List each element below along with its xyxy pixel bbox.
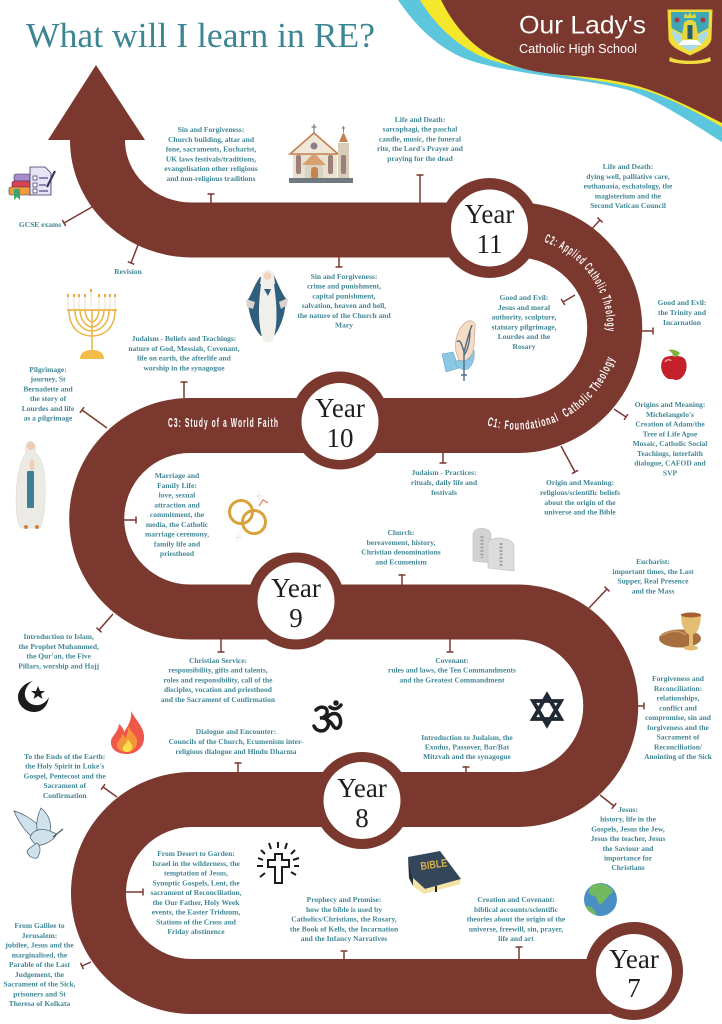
topic: Marriage and Family Life: media, the Catholic xyxy=(146,520,209,529)
year 11 marker: 11 xyxy=(476,229,502,259)
topic: Judaism Beliefs and Teachings: Judaism - Beliefs and Teachings: xyxy=(132,334,236,343)
topic: From Galilee to Jerusalem: Judgement, the xyxy=(15,970,65,979)
year 9 marker: Year xyxy=(271,573,321,603)
year 8 marker: 8 xyxy=(355,803,369,833)
topic: Forgiveness and Reconciliation: conflict and xyxy=(659,703,698,712)
topic: Pilgrimage: as a pilgrimage xyxy=(24,414,73,422)
topic: Creation and Covenant: biblical accounts/scientific xyxy=(474,905,559,914)
topic: Origin and Meaning (beliefs): religious/scientific beliefs xyxy=(540,488,620,497)
topic: Pilgrimage: journey, St xyxy=(29,375,66,384)
topic: Marriage and Family Life: commitment, the xyxy=(150,510,205,519)
topic: Pilgrimage xyxy=(22,365,107,428)
topic: Sin and Forgiveness (crime): Mary xyxy=(335,320,353,330)
icon: exam books xyxy=(9,167,55,200)
topic: Sin and Forgiveness (crime): the nature of the Church and xyxy=(297,311,391,320)
topic: Prophecy and Promise: Catholics/Christians, the Rosary, xyxy=(291,915,397,924)
topic: Introduction to Islam xyxy=(18,614,113,670)
topic: Church: Church: xyxy=(388,528,414,537)
topic: From Desert to Garden: Stations of the Cross and xyxy=(156,917,237,926)
topic: Good and Evil (moral authority): Lourdes and the xyxy=(498,332,551,341)
year 10 marker xyxy=(291,372,389,470)
year 11 marker: Year xyxy=(465,199,514,229)
topic: Church xyxy=(361,528,441,585)
topic: From Galilee to Jerusalem: prisoners and St xyxy=(13,989,66,998)
topic: Pilgrimage: Pilgrimage: xyxy=(29,365,67,374)
topic: From Galilee to Jerusalem xyxy=(3,921,91,1008)
topic: From Galilee to Jerusalem: Sacrament of the Sick, xyxy=(3,980,76,988)
topic: Life and Death (dying well): magisterium and the xyxy=(595,191,662,200)
icon: Our Lady of Lourdes statue xyxy=(16,441,45,529)
topic: Forgiveness and Reconciliation: Reconciliation: xyxy=(654,684,702,693)
icon: apple xyxy=(661,350,687,380)
topic: Origins and Meaning (art): Teachings, interfaith xyxy=(637,449,704,458)
topic: From Galilee to Jerusalem: Parable of the Last xyxy=(9,960,71,969)
topic: Eucharist: Eucharist: xyxy=(636,557,670,566)
topic: Life and Death (dying well) xyxy=(584,162,673,232)
topic: From Desert to Garden: Israel in the wilderness, the xyxy=(152,859,241,868)
topic: Eucharist: Supper, Real Presence xyxy=(617,577,689,586)
topic: Sin and Forgiveness (crime): salvation, heaven and hell, xyxy=(302,301,386,310)
topic: Jesus xyxy=(591,795,665,872)
year 9 marker: 9 xyxy=(289,603,303,633)
road label: C2: C2: Applied Catholic Theology xyxy=(545,234,616,332)
topic: Sin and Forgiveness (crime) xyxy=(297,257,391,330)
topic: Dialogue and Encounter: Councils of the Church, Ecumenism inter- xyxy=(168,737,304,746)
topic: Origin and Meaning (beliefs): about the origin of the xyxy=(544,498,616,507)
topic: Introduction to Judaism: Introduction to Judaism, the xyxy=(421,733,513,742)
topic: Life and Death (funeral rite): praying for the dead xyxy=(387,154,454,163)
topic: Good and Evil (Trinity): the Trinity and xyxy=(658,308,707,317)
topic: Prophecy and Promise xyxy=(290,895,399,959)
topic: Revision: Revision xyxy=(114,267,143,276)
topic: Sin and Forgiveness (church building): Sin and Forgiveness: xyxy=(178,125,244,134)
icon: church xyxy=(289,124,353,183)
topic: Marriage and Family Life: Family Life: xyxy=(157,481,197,490)
icon: menorah xyxy=(67,289,117,359)
topic: Christian Service: disciples, vocation and priesthood xyxy=(164,685,273,694)
topic: Introduction to Judaism: Exodus, Passover, Bar/Bat xyxy=(425,742,510,752)
topic: Marriage and Family Life: love, sexual xyxy=(159,490,195,500)
topic: Judaism Practices: Judaism - Practices: xyxy=(412,468,476,477)
topic: Creation and Covenant: Creation and Covenant: xyxy=(477,895,555,904)
topic: Covenant: rules and laws, the Ten Commandments xyxy=(388,666,516,675)
topic: From Galilee to Jerusalem: Theresa of Kolkata xyxy=(9,999,71,1008)
topic: To the Ends of the Earth xyxy=(24,752,117,800)
topic: Jesus: Christians xyxy=(611,863,645,872)
topic: Forgiveness and Reconciliation: Forgiveness and xyxy=(652,674,705,683)
icon: Bible: BIBLE xyxy=(420,857,448,873)
topic: Good and Evil (Trinity): Incarnation xyxy=(663,318,702,327)
icon: dove xyxy=(14,808,63,858)
topic: Creation and Covenant: life and art xyxy=(498,934,534,943)
topic: From Desert to Garden xyxy=(124,849,242,936)
topic: Prophecy and Promise: how the bible is used by xyxy=(306,905,382,914)
topic: Sin and Forgiveness (church building): UK laws festivals/traditions, xyxy=(166,154,256,163)
topic: Judaism Beliefs and Teachings: nature of God, Messiah, Covenant, xyxy=(128,344,240,353)
topic: Christian Service: Christian Service: xyxy=(189,656,247,665)
topic: Marriage and Family Life: attraction and xyxy=(154,500,201,509)
topic: Introduction to Islam: the Qur'an, the Five xyxy=(26,652,92,661)
topic: Life and Death (dying well): Second Vatican Council xyxy=(590,201,666,210)
topic: From Desert to Garden: sacrament of Reconciliation, xyxy=(150,888,242,897)
topic: From Desert to Garden: temptation of Jesus, xyxy=(164,868,228,878)
topic: Good and Evil (moral authority): Jesus and moral xyxy=(498,303,550,312)
header banner xyxy=(398,0,722,142)
icon: praying hands with rosary xyxy=(442,321,475,381)
icon: stone tablets xyxy=(473,528,514,571)
topic: Sin and Forgiveness (church building): fone, sacraments, Eucharist, xyxy=(166,145,256,154)
topic: Judaism Practices: festivals xyxy=(431,488,457,497)
icon: earth globe xyxy=(584,883,617,916)
topic: To the Ends of the Earth: Confirmation xyxy=(43,791,87,800)
topic: Judaism Beliefs and Teachings: worship in the synagogue xyxy=(143,363,225,372)
topic: Creation and Covenant: theories about the origin of the xyxy=(467,915,566,924)
topic: Sin and Forgiveness (church building): Church building, altar and xyxy=(168,135,255,144)
topic: Introduction to Judaism: Mitzvah and the synagogue xyxy=(423,752,512,761)
topic: Creation and Covenant: universe, freewill, sin, prayer, xyxy=(469,924,563,933)
topic: Marriage and Family Life: priesthood xyxy=(160,549,195,558)
topic: GCSE exams: GCSE exams xyxy=(19,220,61,229)
topic: Origins and Meaning (art): Michelangelo's xyxy=(646,410,694,419)
topic: From Desert to Garden: the Our Father, Holy Week xyxy=(153,898,240,907)
topic: Prophecy and Promise: Prophecy and Promise: xyxy=(307,895,381,904)
topic: Judaism Beliefs and Teachings xyxy=(128,334,240,398)
topic: Prophecy and Promise: the Book of Kells, the Incarnation xyxy=(290,924,399,933)
topic: To the Ends of the Earth: Sacrament of xyxy=(43,781,87,790)
topic: Marriage and Family Life xyxy=(122,471,209,558)
topic: Marriage and Family Life: Marriage and xyxy=(155,471,200,480)
topic: Forgiveness and Reconciliation: compromise, sin and xyxy=(645,713,712,722)
topic: Covenant xyxy=(388,639,516,684)
topic: GCSE exams xyxy=(19,207,92,229)
icon: Bible xyxy=(408,851,461,894)
year 11 marker xyxy=(440,178,540,278)
topic: Judaism Practices xyxy=(411,452,478,497)
icon: Virgin Mary statue xyxy=(246,270,288,342)
topic: Life and Death (dying well): euthanasia, eschatology, the xyxy=(584,182,673,191)
topic: Sin and Forgiveness (crime): capital punishment, xyxy=(312,291,376,300)
topic: Jesus: Jesus the teacher, Jesus xyxy=(591,834,665,843)
topic: Good and Evil (moral authority) xyxy=(491,293,575,351)
topic: From Desert to Garden: Friday abstinence xyxy=(167,927,225,936)
topic: Prophecy and Promise: and the Infancy Narratives xyxy=(301,934,387,943)
year 8 marker xyxy=(314,752,410,849)
topic: Jesus: Gospels, Jesus the Jew, xyxy=(591,824,665,833)
title: What will I learn in RE? xyxy=(26,16,375,55)
topic: Sin and Forgiveness (crime): crime and punishment, xyxy=(307,282,381,291)
topic: Church: Christian denominations xyxy=(361,548,441,557)
topic: Judaism Beliefs and Teachings: life on earth, the afterlife and xyxy=(137,354,232,363)
topic: Life and Death (funeral rite): candle, music, the funeral xyxy=(379,134,461,143)
topic: Sin and Forgiveness (church building): evangelisation other religious xyxy=(164,164,258,173)
topic: Christian Service xyxy=(161,639,276,704)
topic: Dialogue and Encounter: religious dialogue and Hindu Dharma xyxy=(175,747,297,756)
year 7 marker: 7 xyxy=(627,973,641,1003)
icon: bread and chalice xyxy=(659,612,701,650)
road label: C3: C3: Study of a World Faith xyxy=(168,416,279,430)
topic: Sin and Forgiveness (church building) xyxy=(164,125,258,203)
topic: Introduction to Islam: Pillars, worship and Hajj xyxy=(18,661,100,670)
topic: Sin and Forgiveness (crime): Sin and Forgiveness: xyxy=(311,272,377,281)
topic: Origin and Meaning (beliefs) xyxy=(540,446,620,517)
topic: From Desert to Garden: events, the Easter Triduum, xyxy=(152,908,240,916)
topic: Christian Service: responsibility, gifts and talents, xyxy=(168,666,268,675)
topic: Life and Death (funeral rite): rite, the Lord's Prayer and xyxy=(377,144,464,153)
topic: Origins and Meaning (art): Origins and Meaning: xyxy=(635,400,705,409)
topic: Marriage and Family Life: family life and xyxy=(154,539,201,548)
topic: From Galilee to Jerusalem: Jerusalem: xyxy=(22,931,57,940)
topic: From Desert to Garden: Synoptic Gospels, Lent, the xyxy=(152,878,240,887)
topic: Origin and Meaning (beliefs): universe and the Bible xyxy=(544,508,616,517)
topic: Jesus: history, life in the xyxy=(600,815,657,824)
topic: To the Ends of the Earth: To the Ends of the Earth: xyxy=(24,752,105,761)
topic: Church: and Ecumenism xyxy=(375,557,427,566)
topic: Forgiveness and Reconciliation: Anointing of the Sick xyxy=(644,752,713,761)
topic: Life and Death (funeral rite): Life and Death: xyxy=(395,115,445,124)
topic: Origins and Meaning (art): Mosaic, Catholic Social xyxy=(633,439,707,448)
topic: Introduction to Judaism xyxy=(421,733,513,772)
topic: Good and Evil (moral authority): Rosary xyxy=(513,342,536,351)
topic: Pilgrimage: Bernadette and xyxy=(23,384,74,393)
school name xyxy=(519,12,646,56)
topic: Eucharist xyxy=(589,557,694,608)
school name: Catholic High School xyxy=(519,42,637,56)
topic: Jesus: importance for xyxy=(604,854,653,862)
icon: flame xyxy=(111,711,144,754)
topic: From Galilee to Jerusalem: jubilee, Jesus and the xyxy=(4,940,74,950)
topic: Creation and Covenant xyxy=(467,895,566,959)
topic: Origins and Meaning (art) xyxy=(614,400,707,477)
topic: Origin and Meaning (beliefs): Origin and Meaning: xyxy=(546,478,614,487)
icon: school crest xyxy=(668,10,712,64)
topic: Revision xyxy=(114,245,143,276)
year 10 marker: Year xyxy=(315,393,365,423)
topic: Introduction to Islam: Introduction to Islam, xyxy=(23,632,94,641)
icon: om symbol xyxy=(314,702,341,731)
topic: Life and Death (dying well): dying well, palliative care, xyxy=(586,172,670,181)
topic: Good and Evil (Trinity) xyxy=(642,298,707,334)
year 7 marker xyxy=(585,922,683,1020)
topic: Christian Service: roles and responsibility, call of the xyxy=(164,675,273,684)
topic: Sin and Forgiveness (church building): and non-religious traditions xyxy=(166,174,256,183)
icon: wedding rings xyxy=(230,492,268,541)
winding road with arrow xyxy=(48,65,634,986)
topic: Good and Evil (moral authority): statuary pilgrimage, xyxy=(492,322,557,331)
icon: crescent and star xyxy=(18,681,49,712)
topic: Origins and Meaning (art): Tree of Life Apse xyxy=(643,429,698,438)
topic: Church: bereavement, history, xyxy=(367,538,436,547)
topic: Forgiveness and Reconciliation xyxy=(638,674,713,761)
topic: Eucharist: important times, the Last xyxy=(612,567,694,576)
year 10 marker: 10 xyxy=(326,423,354,453)
topic: Jesus: Jesus: xyxy=(618,805,638,814)
topic: Good and Evil (moral authority): Good and Evil: xyxy=(500,293,548,302)
topic: Forgiveness and Reconciliation: Sacrament of xyxy=(657,732,700,742)
topic: Life and Death (funeral rite): sarcophagi, the paschal xyxy=(383,125,457,134)
topic: From Desert to Garden: From Desert to Garden: xyxy=(157,849,235,858)
topic: Jesus: the Saviour and xyxy=(603,844,654,853)
topic: Good and Evil (Trinity): Good and Evil: xyxy=(658,298,706,307)
topic: Forgiveness and Reconciliation: forgiveness and the xyxy=(647,723,710,732)
topic: Covenant: and the Greatest Commandment xyxy=(399,675,505,684)
topic: Christian Service: and the Sacrament of Confirmation xyxy=(161,695,276,704)
topic: Origins and Meaning (art): Creation of Adam/the xyxy=(635,420,705,428)
topic: Origins and Meaning (art): SVP xyxy=(663,468,678,477)
topic: Dialogue and Encounter: Dialogue and Encounter: xyxy=(196,727,276,736)
topic: Introduction to Islam: the Prophet Muhammed, xyxy=(18,642,99,651)
topic: Forgiveness and Reconciliation: relationships, xyxy=(656,694,700,702)
topic: Judaism Practices: rituals, daily life and xyxy=(411,478,478,487)
year 8 marker: Year xyxy=(337,773,387,803)
topic: Life and Death (dying well): Life and Death: xyxy=(603,162,653,171)
topic: Good and Evil (moral authority): authority, sculpture, xyxy=(491,313,557,322)
year 7 marker: Year xyxy=(609,944,659,974)
year 9 marker xyxy=(248,552,344,650)
school name: Our Lady's xyxy=(519,12,646,40)
topic: Marriage and Family Life: marriage ceremony, xyxy=(145,530,209,538)
topic: From Galilee to Jerusalem: marginalised, the xyxy=(12,950,68,959)
icon: radiant cross xyxy=(257,842,299,883)
topic: To the Ends of the Earth: the Holy Spirit in Luke's xyxy=(25,762,104,771)
topic: Life and Death (funeral rite) xyxy=(377,115,464,203)
topic: Pilgrimage: Lourdes and life xyxy=(22,404,75,413)
topic: Eucharist: and the Mass xyxy=(632,586,674,595)
topic: Origins and Meaning (art): dialogue, CAFOD and xyxy=(634,458,707,468)
topic: Covenant: Covenant: xyxy=(435,656,469,665)
topic: Forgiveness and Reconciliation: Reconciliation/ xyxy=(654,742,703,751)
topic: Pilgrimage: the story of xyxy=(30,394,67,403)
topic: Dialogue and Encounter xyxy=(168,727,304,772)
icon: star of David xyxy=(533,695,561,725)
topic: To the Ends of the Earth: Gospel, Pentecost and the xyxy=(24,771,106,780)
road label: C1: C1: Foundational Catholic Theology xyxy=(488,356,616,430)
topic: From Galilee to Jerusalem: From Galilee to xyxy=(14,921,65,930)
